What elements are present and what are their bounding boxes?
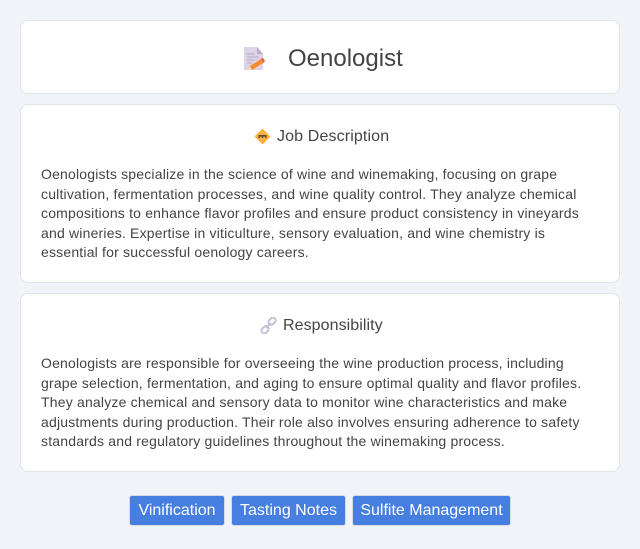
tag: Vinification: Vinification bbox=[138, 502, 216, 519]
tag: Vinification bbox=[130, 496, 224, 525]
text block: job description: and wineries. Expertise in viticulture, sensory evaluation, and wine chemistry is bbox=[41, 225, 545, 241]
panel: responsibility bbox=[20, 293, 620, 472]
text block: job description: compositions to enhance flavor profiles and ensure product consistency in vineyards bbox=[41, 205, 579, 221]
icon: orange diamond sign bbox=[254, 128, 270, 144]
text block: job description: Oenologists specialize in the science of wine and winemaking, focusing on grape bbox=[41, 166, 557, 182]
text block: responsibility bbox=[41, 355, 581, 449]
icon: chain link bbox=[260, 317, 277, 334]
heading: job description: Job Description bbox=[277, 128, 389, 145]
tag: Tasting Notes: Tasting Notes bbox=[240, 502, 337, 519]
title: Oenologist bbox=[288, 45, 403, 72]
text block: responsibility: Oenologists are responsible for overseeing the wine production process, including bbox=[41, 355, 564, 371]
heading: responsibility: Responsibility bbox=[283, 317, 383, 334]
icon: document with pencil bbox=[244, 47, 265, 70]
text block: responsibility: adjustments during production. Their role also involves ensuring adherence to safety bbox=[41, 414, 580, 430]
text block: responsibility: They analyze chemical and sensory data to monitor wine characteristics and make bbox=[41, 394, 567, 410]
panel: responsibility: standards and regulatory guidelines throughout the winemaking process. bbox=[41, 433, 505, 449]
text block: job description: cultivation, fermentation processes, and wine quality control. They analyze chemical bbox=[41, 186, 577, 202]
tag: Sulfite Management bbox=[353, 496, 510, 525]
tag: Tasting Notes bbox=[232, 496, 345, 525]
text block: job description bbox=[41, 166, 579, 260]
tag: Sulfite Management: Sulfite Management bbox=[360, 502, 503, 519]
panel: job description: essential for successful oenology careers. bbox=[41, 244, 309, 260]
panel: title card bbox=[20, 20, 620, 94]
text block: responsibility: grape selection, fermentation, and aging to ensure optimal quality and flavor profiles. bbox=[41, 375, 581, 391]
panel: job description bbox=[20, 104, 620, 283]
